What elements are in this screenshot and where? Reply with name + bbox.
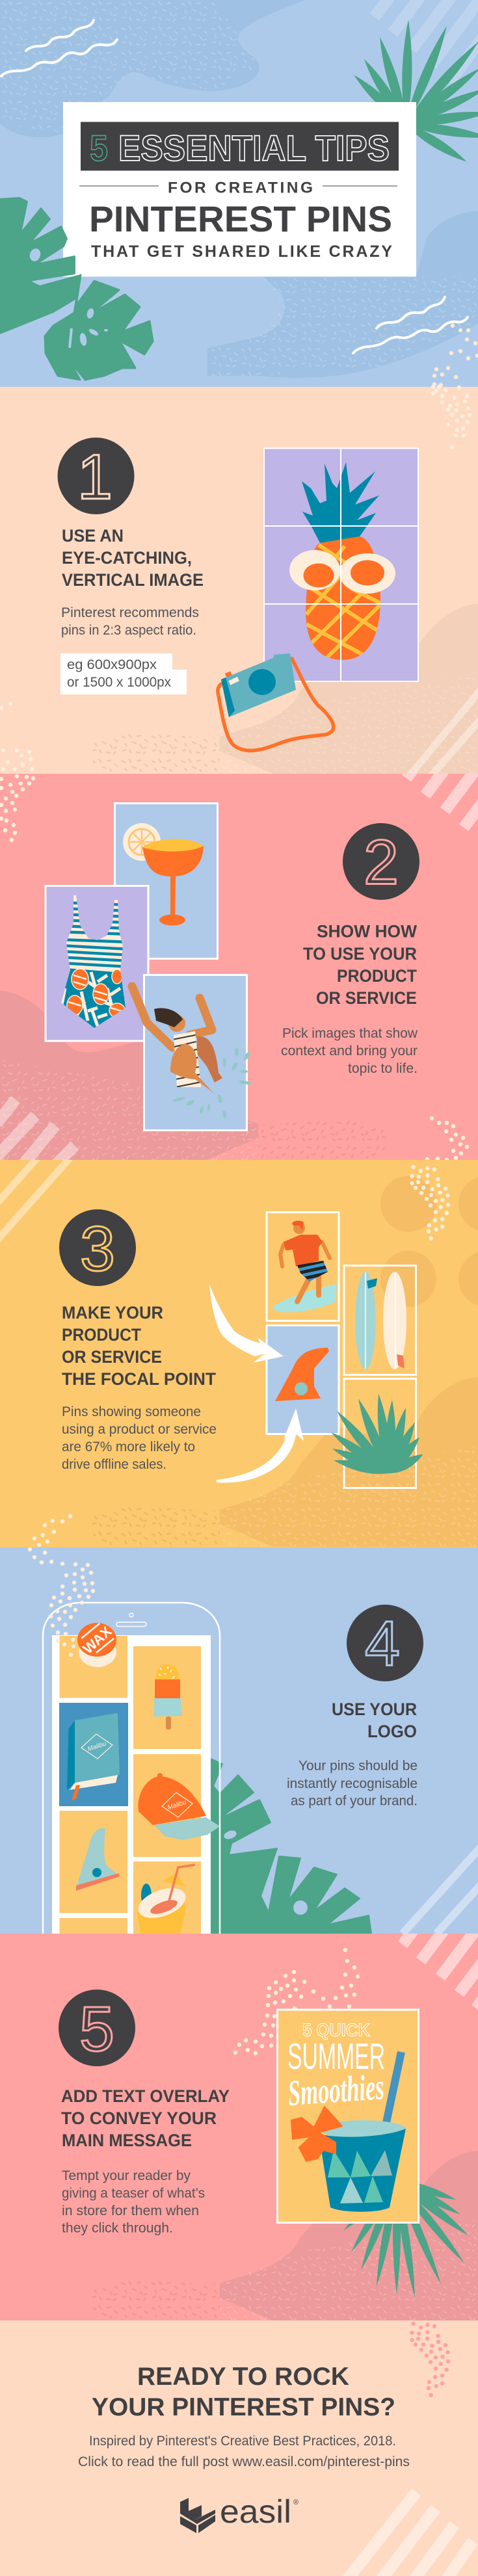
- heading: use an eye-catching vertical image: VERTICAL IMAGE: [62, 570, 204, 590]
- title number 5: 5: [90, 127, 108, 168]
- diagonal stripes: [403, 1847, 478, 1934]
- hero background blob bottom right: [207, 211, 478, 378]
- dots top right: [412, 2324, 448, 2395]
- body text: are 67% more likely to: [62, 1439, 195, 1454]
- icon: popsicle: [153, 1664, 182, 1729]
- body text: giving a teaser of what’s: [62, 2186, 205, 2201]
- icon: notebook: Malibu: [86, 1741, 107, 1753]
- body text: Pick images that show: [282, 1026, 418, 1041]
- dots top right: [433, 387, 470, 447]
- body text: [62, 1404, 217, 1472]
- icon: wax tin: [77, 1623, 116, 1667]
- arrow: lower brush arrow: [217, 1408, 304, 1482]
- body text: using a product or service: [62, 1422, 217, 1437]
- body text: [281, 1026, 418, 1076]
- heading: make your product or service the focal point: OR SERVICE: [62, 1347, 162, 1367]
- scattered texture patch: [85, 733, 220, 772]
- number badge 5: 5: [79, 1993, 114, 2064]
- surfboard: [272, 1284, 337, 1312]
- woman arm left: [132, 986, 172, 1047]
- heading: show how to use your product or service: SHOW HOW: [317, 921, 417, 941]
- icon: palm leaf under pin: [341, 2176, 471, 2298]
- body text: drive offline sales.: [62, 1457, 166, 1472]
- easil logo: easil: [220, 2493, 291, 2530]
- heading: show how to use your product or service: OR SERVICE: [316, 988, 417, 1008]
- panel: tip 4: [0, 1547, 478, 1934]
- background blob: [220, 1377, 478, 1547]
- icon: palm leaf top right: [351, 20, 478, 166]
- dots bottom left: [34, 1516, 70, 1545]
- tile: bottom left: [60, 1918, 127, 1934]
- panel: tip 2: [0, 743, 478, 1165]
- icon: straw: [385, 2052, 401, 2129]
- stripes bottom right: [346, 2492, 473, 2576]
- background blob: [0, 991, 258, 1161]
- woman arm right: [189, 998, 212, 1035]
- dots top left: [30, 1549, 93, 1655]
- squiggles top left: [1, 20, 117, 76]
- heading: show how to use your product or service: TO USE YOUR: [303, 944, 417, 964]
- panel: tip 5: [0, 1909, 478, 2320]
- pin: summer smoothies: [277, 2010, 419, 2222]
- blob texture: [220, 673, 478, 774]
- number badge 1: 1: [77, 441, 113, 512]
- background blob: [220, 2151, 478, 2320]
- diagonal stripes: [406, 689, 478, 780]
- icon: smoothie cup: [319, 2120, 406, 2212]
- pin: cocktail: [114, 804, 217, 958]
- panel: tip 1: [0, 387, 478, 780]
- pin: empty frame: [344, 1378, 416, 1488]
- callout: size examples: [60, 653, 187, 694]
- dots top left: [1, 776, 33, 840]
- title: essential tips: ESSENTIAL TIPS: [118, 127, 390, 168]
- hero blob texture: [0, 0, 259, 133]
- title card: [63, 102, 416, 277]
- body text: [61, 605, 199, 638]
- background circles: [380, 1176, 478, 1307]
- heading: use an eye-catching vertical image: EYE-CATCHING,: [62, 548, 192, 568]
- phone mockup: [43, 1603, 220, 1934]
- phone speaker: [116, 1622, 146, 1627]
- icon: notebook: [67, 1713, 120, 1801]
- heading: make your product or service the focal point: MAKE YOUR: [62, 1303, 163, 1322]
- heading: ready to rock: READY TO ROCK: [137, 2363, 349, 2391]
- phone screen: [52, 1635, 211, 1934]
- stripes top right: [402, 774, 478, 831]
- icon: monstera leaf lower: [28, 247, 153, 380]
- blob texture: [220, 2220, 478, 2320]
- tile: wax: [60, 1636, 127, 1698]
- icon: surf fin: [76, 1828, 120, 1891]
- arrow: upper brush arrow: [209, 1284, 284, 1363]
- number badge 2: [343, 823, 419, 900]
- heading: make your product or service the focal point: THE FOCAL POINT: [62, 1369, 216, 1389]
- surfer arms: [280, 1242, 330, 1267]
- surfer legs: [297, 1274, 319, 1302]
- icon: coconut drink: [134, 1865, 195, 1934]
- number badge 5: [59, 1990, 135, 2066]
- body text: they click through.: [62, 2221, 173, 2235]
- pin: surfer: [267, 1212, 339, 1321]
- heading: show how to use your product or service: PRODUCT: [337, 966, 417, 986]
- body text: topic to life.: [348, 1061, 418, 1076]
- heading: use your logo: [332, 1700, 417, 1741]
- hero blob texture lower: [207, 276, 478, 376]
- icon: monstera leaf left: [0, 198, 81, 334]
- tile: notebook background: [59, 1703, 128, 1806]
- blob texture: [0, 1060, 258, 1161]
- divider rules: [79, 185, 397, 187]
- title: pinterest pins: PINTEREST PINS: [89, 198, 392, 239]
- heading: add text overlay: [61, 2086, 230, 2150]
- dots around pin: [235, 1950, 358, 2053]
- callout: size examples: or 1500 x 1000px: [67, 675, 171, 690]
- diagonal stripes: [0, 1155, 73, 1241]
- number badge 1: [57, 438, 134, 514]
- callout: size examples: eg 600x900px: [67, 657, 157, 672]
- number badge 3: 3: [80, 1213, 115, 1284]
- heading: make your product or service the focal point: [62, 1303, 216, 1389]
- heading: add text overlay: MAIN MESSAGE: [62, 2131, 192, 2150]
- subtitle: for creating: FOR CREATING: [168, 179, 313, 196]
- dots bottom right: [427, 1118, 467, 1160]
- scattered texture patch: [258, 1120, 393, 1159]
- icon: cap: Malibu: [166, 1799, 187, 1811]
- hero background blob top left: [0, 0, 305, 137]
- scattered texture patch: [85, 1506, 220, 1545]
- body text: context and bring your: [281, 1044, 418, 1058]
- tile: drink background: [133, 1861, 201, 1934]
- woman hair: [154, 1008, 183, 1027]
- number badge 4: 4: [365, 1608, 400, 1679]
- body text: instantly recognisable: [287, 1776, 418, 1791]
- grid lines: [264, 449, 418, 681]
- icon: wax tin: WAX: [79, 1623, 115, 1657]
- phone camera: [129, 1613, 133, 1617]
- number badge 4: [347, 1605, 423, 1681]
- body text: [62, 2168, 205, 2235]
- squiggles bottom right: [353, 297, 468, 353]
- body text: [287, 1758, 418, 1809]
- tile: fin background: [60, 1811, 127, 1913]
- heading: use your logo: USE YOUR: [332, 1700, 417, 1719]
- stripes bottom left: [0, 1099, 75, 1165]
- body text: Pins showing someone: [62, 1404, 201, 1419]
- subtitle: shared like crazy: THAT GET SHARED LIKE CRAZY: [91, 243, 392, 261]
- easil logo: [180, 2493, 299, 2533]
- heading: add text overlay: TO CONVEY YOUR: [61, 2109, 217, 2128]
- stripes top right: [398, 1934, 478, 2010]
- panel: closing call to action: [0, 2320, 478, 2576]
- number badge 2: 2: [364, 827, 399, 897]
- dots bottom right of hero: [434, 326, 477, 385]
- icon: cap: [138, 1773, 220, 1840]
- icon: green plant: [328, 1393, 425, 1478]
- panel: tip 3: [0, 1155, 478, 1547]
- number badge 3: [59, 1209, 136, 1286]
- surfer head: [293, 1222, 305, 1234]
- scattered texture patch: [85, 2280, 220, 2319]
- body text: pins in 2:3 aspect ratio.: [61, 623, 196, 638]
- tile: popsicle background: [133, 1646, 201, 1749]
- woman head: [168, 1015, 185, 1032]
- body text: Your pins should be: [299, 1758, 418, 1774]
- heading: your pinterest pins: YOUR PINTEREST PINS?: [92, 2393, 395, 2421]
- heading: use an eye-catching vertical image: USE AN: [62, 526, 124, 545]
- heading: use your logo: LOGO: [367, 1722, 417, 1741]
- heading: add text overlay: ADD TEXT OVERLAY: [61, 2086, 230, 2106]
- blob texture: [220, 1446, 478, 1547]
- title banner: [81, 122, 399, 170]
- pin: surf fin: [267, 1325, 339, 1434]
- icon: bow: [291, 2107, 342, 2161]
- pin title: summer: SUMMER: [287, 2036, 385, 2077]
- body text: as part of your brand.: [291, 1793, 418, 1809]
- link text: Click to read the full post www.easil.com/pinterest-pins: [78, 2454, 410, 2469]
- woman right leg: [196, 1036, 222, 1083]
- tile: cap background: [133, 1754, 201, 1857]
- phone outline: [43, 1603, 220, 1934]
- pin: jumping woman: [132, 975, 252, 1130]
- heading: show how to use your product or service: [303, 921, 417, 1008]
- body text: Pinterest recommends: [61, 605, 199, 620]
- woman swimsuit: [174, 1031, 201, 1087]
- dots bottom left: [1, 703, 32, 769]
- woman thigh: [170, 1044, 215, 1094]
- icon: camera: [218, 653, 334, 750]
- dots top right: [412, 1167, 448, 1239]
- icon: monstera leaf behind phone: [211, 1759, 371, 1934]
- hero stripes top right: [375, 0, 478, 82]
- easil logo: ®: [293, 2499, 299, 2506]
- background blob: [220, 604, 478, 774]
- water splashes: [172, 1048, 252, 1118]
- surfer hair: [292, 1221, 304, 1230]
- surfer shirt: [284, 1235, 323, 1267]
- body text: Tempt your reader by: [62, 2168, 191, 2183]
- pin title: 5 quick: 5 QUICK: [302, 2019, 370, 2040]
- body text: in store for them when: [62, 2203, 199, 2218]
- pin title: smoothies: Smoothies: [287, 2067, 386, 2114]
- pin: surfboards: [344, 1265, 416, 1374]
- heading: use an eye-catching vertical image: [62, 526, 204, 590]
- icon: pineapple: [289, 462, 395, 660]
- surfer shorts: [297, 1261, 328, 1281]
- pin: swimsuit: [46, 886, 148, 1041]
- credit text: Inspired by Pinterest's Creative Best Practices, 2018.: [89, 2434, 396, 2449]
- panel: hero header: [0, 0, 478, 387]
- pin with rule of thirds grid: [264, 449, 418, 681]
- heading: make your product or service the focal point: PRODUCT: [62, 1325, 141, 1345]
